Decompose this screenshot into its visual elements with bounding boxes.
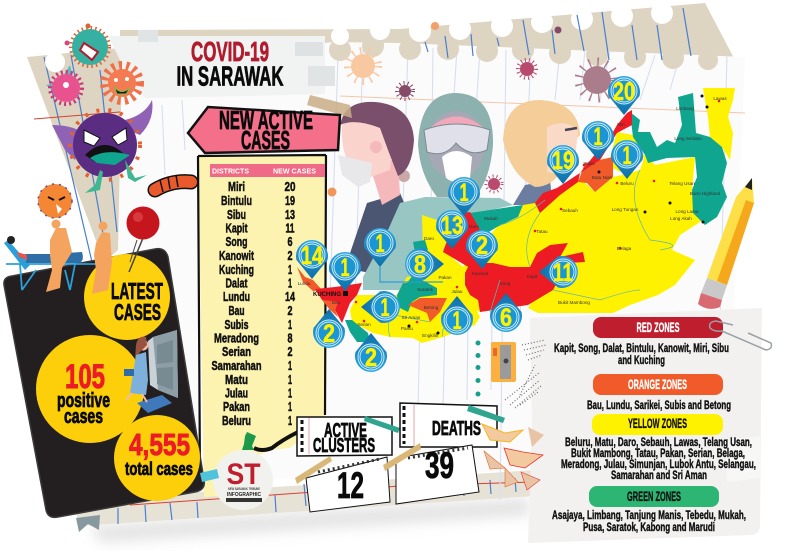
circle: 105 positive cases xyxy=(36,335,144,443)
pin: Bau 2 xyxy=(313,309,345,348)
pin: Bintulu 19 xyxy=(547,145,579,184)
map: yellow zones east xyxy=(460,155,703,313)
table rows: 2 xyxy=(288,345,293,359)
pin: Bintulu 19: 19 xyxy=(552,147,574,175)
panel: zone legend xyxy=(528,308,762,543)
table rows: 8 xyxy=(288,332,293,346)
table rows: Matu xyxy=(225,373,248,387)
pin: Serian 2: 2 xyxy=(365,344,377,372)
card: active clusters: CLUSTERS xyxy=(313,435,375,457)
table rows: Bau xyxy=(228,304,244,318)
map: place labels: Mukah xyxy=(484,216,498,221)
table rows: Serian xyxy=(222,345,251,359)
front paper: lined notebook sheet xyxy=(118,42,745,500)
map: red zones Kanowit, Song, Kapit xyxy=(465,243,585,312)
pin: Meradong 8 xyxy=(405,248,444,280)
map: place labels: Subis xyxy=(583,161,595,166)
map: place labels: Tatau xyxy=(536,229,548,234)
map: place labels: Sebauh xyxy=(562,208,578,213)
circle: 4,555 total cases: total cases xyxy=(125,459,193,479)
map: place labels: Lawas xyxy=(713,96,727,101)
pencil sharpener xyxy=(491,342,516,382)
notepad table: new cases by district xyxy=(198,155,326,497)
person: blonde woman xyxy=(503,100,580,205)
map: district boundaries xyxy=(388,170,673,337)
card: deaths: DEATHS xyxy=(432,418,481,440)
person: man with mask xyxy=(338,102,414,273)
map: yellow zones Lawas xyxy=(703,88,735,160)
table rows: 1 xyxy=(288,373,292,387)
table rows: 1 xyxy=(288,276,292,290)
card: active clusters: ACTIVE xyxy=(324,420,367,442)
map: place labels: Betong xyxy=(424,305,439,310)
card: active clusters value 12: 12 xyxy=(337,465,364,506)
map: orange zone Betong xyxy=(408,298,447,322)
map: place labels: Limbang xyxy=(676,106,694,111)
pin: Kanowit 2 xyxy=(466,230,498,269)
map: place labels: Kapit xyxy=(527,274,538,279)
pencil shaving dust xyxy=(505,340,546,408)
pin: Kanowit 2: 2 xyxy=(476,232,488,260)
pin: Samarahan 1 xyxy=(361,291,400,323)
map: place labels: Kanowit xyxy=(472,271,489,276)
map: place labels: Saratok xyxy=(417,287,434,292)
bookmark ribbon xyxy=(76,515,100,532)
pin: Lundu 14: 14 xyxy=(301,242,323,270)
map: place labels: Long Seridan xyxy=(674,136,702,141)
map: place labels: Pantu xyxy=(401,326,413,331)
map: place labels: Serian xyxy=(357,322,371,327)
map: orange zone Subis xyxy=(578,157,613,192)
circle: latest cases: LATEST xyxy=(111,278,163,304)
table rows: Miri xyxy=(228,180,245,194)
table rows: 2 xyxy=(288,249,293,263)
pink arrow sign: new active cases xyxy=(188,105,340,155)
title banner xyxy=(108,30,335,98)
card: active clusters value 12 xyxy=(295,456,390,512)
red zones: and Kuching xyxy=(618,355,665,367)
paperclip xyxy=(710,321,771,350)
table rows xyxy=(212,180,296,428)
map: place labels: Bukit Mambong xyxy=(558,300,590,305)
orange zones xyxy=(587,374,731,412)
circle: 105 positive cases: cases xyxy=(64,406,103,428)
pin: Song 6 xyxy=(490,293,522,332)
map: red zone Miri xyxy=(580,110,632,173)
paper drop shadow xyxy=(90,498,530,542)
table rows: 1 xyxy=(288,263,292,277)
yellow zones: Samarahan and Sri Aman xyxy=(611,470,707,482)
table rows: Pakan xyxy=(223,400,250,414)
tape: blue on tablet corner xyxy=(200,469,219,482)
table rows: 1 xyxy=(288,400,292,414)
table rows: Dalat xyxy=(226,276,248,290)
map connector line xyxy=(380,267,443,282)
pin: Song 6: 6 xyxy=(500,304,512,332)
background viruses xyxy=(328,22,615,196)
tape on banner corner xyxy=(307,95,352,118)
map: place labels: Lundu xyxy=(298,281,311,286)
ST infographic badge xyxy=(213,450,273,510)
pin: Matu 1 xyxy=(364,228,396,267)
orange zones: Bau, Lundu, Sarikei, Subis and Betong xyxy=(587,400,731,412)
map: place labels: Telang Usan xyxy=(669,181,695,186)
ST infographic badge: NEW SARAWAK TRIBUNE xyxy=(228,486,260,491)
green push pin and squiggle xyxy=(242,432,298,450)
table rows: Subis xyxy=(224,318,249,332)
yellow zones xyxy=(561,414,756,482)
table rows: Sibu xyxy=(227,208,246,222)
map: place labels: Daro xyxy=(424,236,434,241)
teal dots xyxy=(476,340,480,396)
map: place labels: Beluru xyxy=(620,181,634,186)
table rows: Song xyxy=(226,235,248,249)
circle: latest cases: CASES xyxy=(114,299,161,325)
pin: Bau 2: 2 xyxy=(323,320,335,348)
map: place labels: Bau xyxy=(332,300,341,305)
pin: Matu 1: 1 xyxy=(376,230,385,258)
person: medic in protective hood xyxy=(363,93,513,290)
map: green zone Mukah xyxy=(470,205,523,233)
map: place labels: Daro xyxy=(469,224,479,229)
pin: Beluru 1 xyxy=(611,140,643,179)
virus: orange small xyxy=(38,184,72,218)
table rows: 6 xyxy=(288,235,293,249)
table rows: Kapit xyxy=(226,222,248,236)
map: place labels: Belaga xyxy=(617,246,632,251)
ST infographic badge: ST xyxy=(226,458,260,491)
table header xyxy=(210,164,325,177)
table rows: Meradong xyxy=(214,332,259,346)
map: yellow patch near Beluru xyxy=(608,132,645,172)
circle: latest cases xyxy=(84,254,170,340)
green zones xyxy=(552,486,746,534)
table rows: Kanowit xyxy=(219,249,255,263)
scalloped holes along the paper top xyxy=(45,2,718,72)
red push pin xyxy=(126,206,160,272)
table rows: 14 xyxy=(285,290,295,304)
pin: Sibu 13 xyxy=(436,210,468,249)
table rows: Kuching xyxy=(219,263,254,277)
virus: caterpillar xyxy=(155,175,191,192)
table rows: 1 xyxy=(288,318,292,332)
map: place labels xyxy=(298,94,727,338)
table rows: 19 xyxy=(285,194,295,208)
pin: Lundu 14 xyxy=(296,240,328,279)
pencil shavings xyxy=(482,424,544,490)
ST infographic badge: INFOGRAPHIC xyxy=(227,492,261,498)
map: yellow zones west xyxy=(350,215,480,343)
map: place labels: Pakan xyxy=(438,275,452,280)
red zones xyxy=(554,317,729,367)
pin: Miri 20 xyxy=(608,76,640,115)
title banner: COVID-19 xyxy=(191,36,269,67)
table rows: 13 xyxy=(285,208,295,222)
pin: Samarahan 1: 1 xyxy=(380,294,390,322)
yellow zones: YELLOW ZONES xyxy=(628,415,687,431)
circle: 105 positive cases: positive xyxy=(57,390,110,412)
map: place labels: Bario Highland xyxy=(690,191,721,196)
table header: DISTRICTS xyxy=(212,168,249,176)
map: red zone Bintulu xyxy=(535,173,580,213)
green zones: Pusa, Saratok, Kabong and Marudi xyxy=(583,522,715,534)
map: place labels: Julau xyxy=(452,289,463,294)
map: place labels: Song xyxy=(500,281,511,286)
pin: Serian 2 xyxy=(355,333,387,372)
pin: Beluru 1: 1 xyxy=(622,142,632,170)
card: deaths xyxy=(400,403,505,447)
pin: Subis 1 xyxy=(582,121,614,160)
virus: purple monster xyxy=(52,100,152,193)
pink arrow sign: new active cases: CASES xyxy=(241,125,290,155)
card: deaths value 39: 39 xyxy=(425,445,454,486)
pin: Dalat 1 xyxy=(448,177,480,216)
illustration: medics with stretcher xyxy=(4,220,112,294)
pin: Kuching 1: 1 xyxy=(340,254,350,282)
pink arrow sign: new active cases: NEW ACTIVE xyxy=(219,105,313,135)
pin: Dalat 1: 1 xyxy=(460,179,469,207)
virus: pink winged xyxy=(46,65,82,104)
map: place labels: Long Lama xyxy=(676,209,699,214)
card: deaths value 39 xyxy=(383,443,479,504)
pin: Kapit 11: 11 xyxy=(553,259,573,287)
circle: 105 positive cases: 105 xyxy=(65,358,105,396)
pin: Sibu 13: 13 xyxy=(441,212,463,240)
table rows: 2 xyxy=(288,304,293,318)
map: place labels: Long Akah xyxy=(670,216,692,221)
pin: Julau 1 xyxy=(441,296,473,335)
pin: Miri 20: 20 xyxy=(613,78,635,106)
map: green zones Limbang and Marudi xyxy=(630,93,727,225)
map: orange zones Lundu and Bau xyxy=(297,267,338,317)
map: place labels: Engkilili xyxy=(422,333,438,338)
circle: 4,555 total cases xyxy=(114,415,200,501)
map: green zones west xyxy=(345,240,437,342)
pin: Subis 1: 1 xyxy=(594,123,603,151)
map: place labels: Batu Niah xyxy=(592,175,613,180)
illustration: girl opening door xyxy=(124,330,178,413)
map: place labels: KUCHING xyxy=(313,292,341,298)
orange zones: ORANGE ZONES xyxy=(628,376,687,392)
table rows: 1 xyxy=(288,359,292,373)
table rows: Beluru xyxy=(222,414,251,428)
pencil xyxy=(698,178,754,309)
table header: NEW CASES xyxy=(273,168,316,176)
virus: orange angry xyxy=(105,66,139,100)
pin: Kapit 11 xyxy=(539,256,578,288)
map: place labels: Sri Aman xyxy=(402,315,421,320)
table rows: Samarahan xyxy=(212,359,262,373)
table rows: 20 xyxy=(284,180,296,194)
card: active clusters xyxy=(297,416,400,457)
pin: Julau 1: 1 xyxy=(452,307,462,335)
virus: teal xyxy=(64,24,109,66)
map: red zone Kuching xyxy=(315,283,362,323)
table rows: Lundu xyxy=(223,290,250,304)
black tablet xyxy=(4,249,204,517)
table rows: 1 xyxy=(288,414,292,428)
red zones: RED ZONES xyxy=(636,319,680,335)
green zones: GREEN ZONES xyxy=(627,488,681,504)
table rows: 11 xyxy=(286,222,295,236)
pin: Meradong 8: 8 xyxy=(414,251,426,279)
map of Sarawak xyxy=(297,88,735,343)
map: place labels: Miri xyxy=(617,122,625,127)
table rows: Bintulu xyxy=(221,194,252,208)
pin: Kuching 1 xyxy=(329,252,361,291)
circle: 4,555 total cases: 4,555 xyxy=(129,427,190,462)
map: place labels: Long Tungan xyxy=(612,207,639,212)
table rows: 1 xyxy=(288,386,292,400)
map: red zones Sibu, Dalat, Daro xyxy=(443,212,488,268)
table rows: Julau xyxy=(225,386,248,400)
title banner: IN SARAWAK xyxy=(176,60,284,92)
